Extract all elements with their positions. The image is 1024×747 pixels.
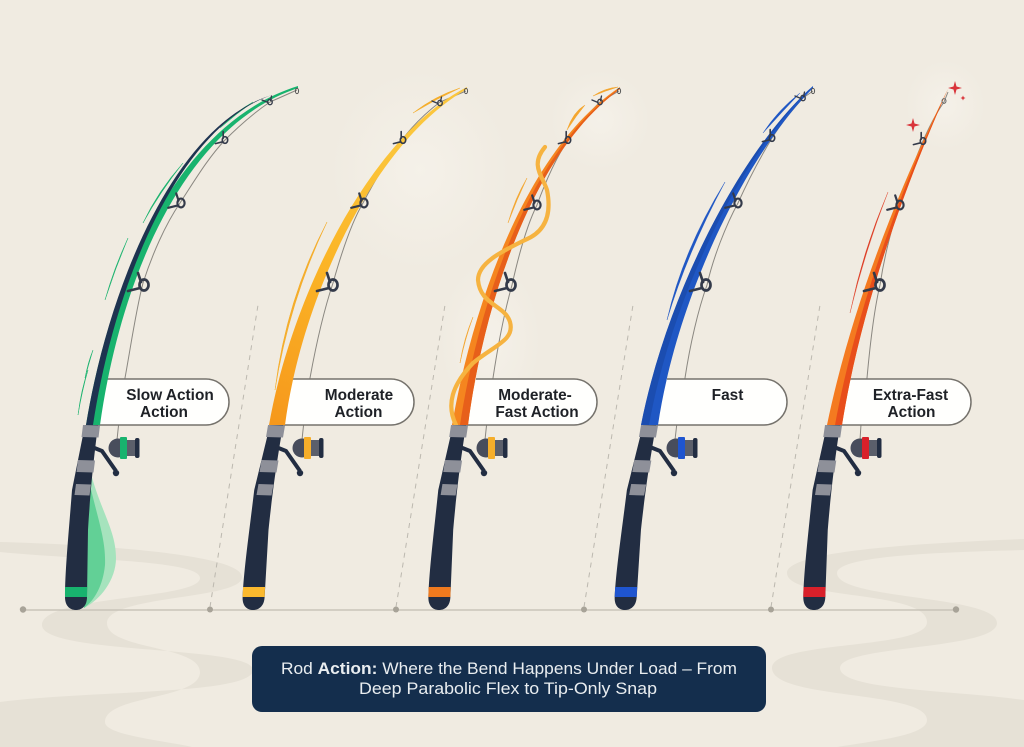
handle bbox=[614, 425, 658, 610]
handle bbox=[65, 425, 100, 610]
rod: fast action bbox=[614, 86, 815, 610]
rod: moderate action bbox=[242, 87, 468, 610]
caption box: Deep Parabolic Flex to Tip-Only Snap bbox=[359, 680, 657, 698]
handle bbox=[803, 425, 842, 610]
flex fan at butt bbox=[78, 470, 116, 608]
reel bbox=[92, 437, 140, 476]
label: Extra-Fast bbox=[873, 387, 948, 404]
blank bbox=[641, 86, 813, 425]
label bbox=[840, 379, 971, 425]
rod: moderate-fast action bbox=[428, 87, 621, 610]
motion streak bbox=[850, 192, 888, 313]
water swoosh left bbox=[0, 542, 253, 747]
fishing line bbox=[860, 92, 948, 440]
motion streaks bbox=[667, 93, 800, 320]
reel bbox=[650, 437, 698, 476]
fishing line bbox=[117, 90, 297, 440]
fishing line bbox=[675, 91, 813, 440]
label: Action bbox=[140, 404, 188, 421]
reel bbox=[460, 437, 508, 476]
label bbox=[283, 379, 414, 425]
handle bbox=[242, 425, 285, 610]
rod: slow action bbox=[65, 86, 299, 610]
label: Moderate- bbox=[498, 387, 572, 404]
fishing line bbox=[302, 91, 466, 440]
sparkles bbox=[906, 81, 966, 132]
baseline with tick dots and dashed dividers bbox=[20, 305, 959, 613]
caption box bbox=[252, 646, 766, 712]
blank bbox=[452, 87, 620, 425]
label bbox=[96, 379, 229, 425]
caption box: Rod Action: Where the Bend Happens Under Load – From bbox=[281, 660, 737, 678]
motion streaks bbox=[275, 88, 460, 390]
handle bbox=[428, 425, 468, 610]
water swoosh right bbox=[772, 539, 1024, 747]
label: Slow Action bbox=[126, 387, 214, 404]
blank bbox=[827, 89, 948, 425]
guides bbox=[317, 88, 468, 291]
label bbox=[465, 379, 597, 425]
guides bbox=[128, 88, 299, 291]
soft glows behind rod tips bbox=[330, 60, 985, 420]
twisting ribbon bbox=[451, 147, 549, 425]
guides bbox=[690, 88, 815, 291]
blank bbox=[86, 86, 298, 425]
rod: extra-fast action bbox=[803, 81, 971, 610]
reel bbox=[276, 437, 324, 476]
label: Fast bbox=[712, 387, 743, 404]
motion streaks bbox=[460, 87, 618, 363]
label: Moderate bbox=[325, 387, 394, 404]
label: Action bbox=[888, 404, 935, 421]
label bbox=[656, 379, 787, 425]
label: Fast Action bbox=[495, 404, 579, 421]
guides bbox=[864, 99, 946, 291]
motion streaks bbox=[78, 102, 253, 415]
label: Action bbox=[335, 404, 382, 421]
blank bbox=[269, 87, 467, 425]
reel bbox=[834, 437, 882, 476]
fishing line bbox=[485, 91, 619, 440]
guides bbox=[495, 88, 621, 291]
